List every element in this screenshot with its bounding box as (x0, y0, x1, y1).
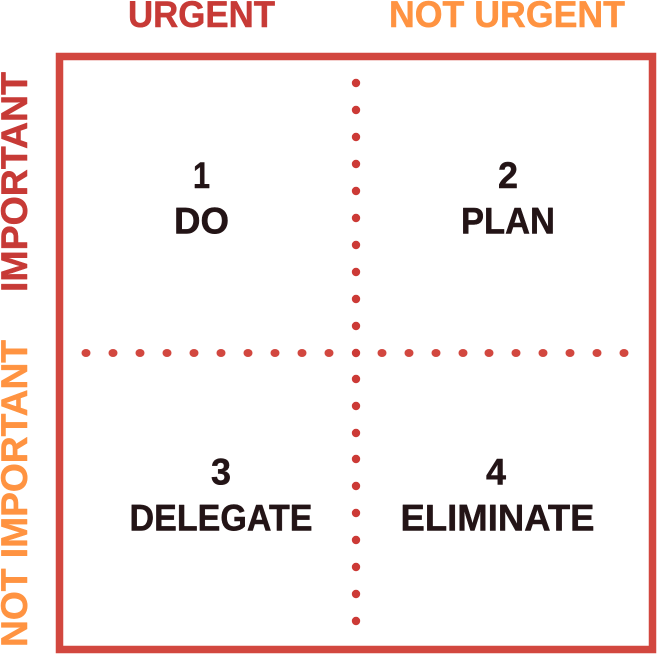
quadrant 3: delegate: DELEGATE (130, 498, 312, 538)
quadrant 2: plan (461, 155, 555, 242)
quadrant 4: eliminate: 4 (486, 452, 506, 492)
quadrant 1: do (174, 155, 229, 242)
quadrant 3: delegate (130, 452, 312, 538)
quadrant 4: eliminate: ELIMINATE (400, 498, 594, 538)
quadrant 1: do: 1 (193, 155, 210, 196)
quadrant 4: eliminate (400, 452, 594, 538)
quadrant 2: plan: PLAN (461, 200, 555, 242)
quadrant 1: do: DO (174, 200, 229, 242)
quadrant 3: delegate: 3 (211, 452, 231, 492)
quadrant 2: plan: 2 (498, 155, 518, 196)
vertical dotted divider (352, 79, 360, 625)
horizontal dotted divider (82, 349, 628, 357)
